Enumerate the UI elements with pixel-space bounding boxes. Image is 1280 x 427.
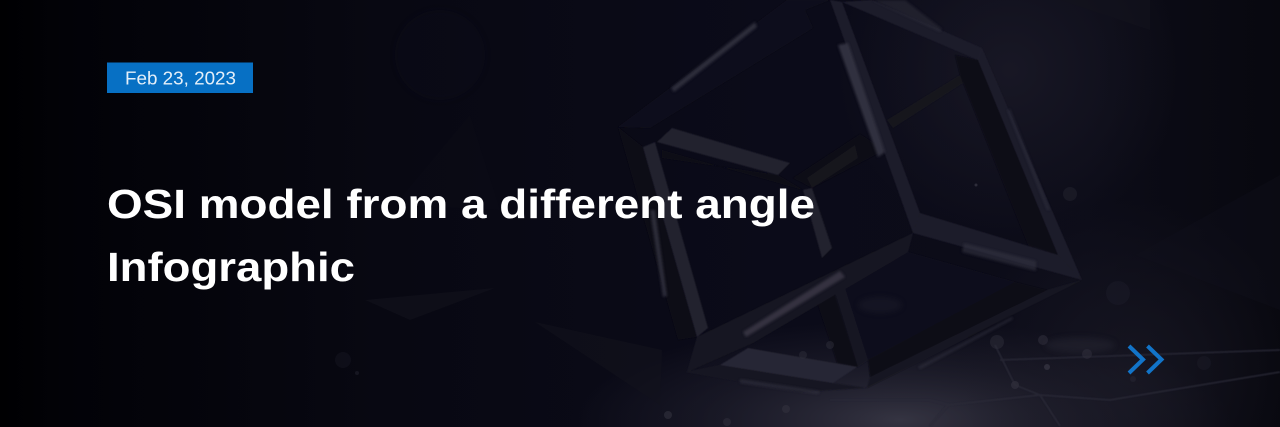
icon: double chevron arrow <box>1129 346 1162 373</box>
network mesh <box>830 345 1280 426</box>
cube wireframe <box>618 0 1082 392</box>
network nodes <box>335 184 1211 426</box>
cube: left face bars <box>643 128 832 337</box>
cube: interior of lower face <box>845 252 1015 360</box>
cube: bottom bars <box>685 233 1082 392</box>
cube: lower-left plate <box>720 348 857 383</box>
title <box>107 181 815 290</box>
background shards <box>365 0 1280 405</box>
date badge: Feb 23, 2023 <box>125 68 236 88</box>
cube: glowing highlights <box>650 0 1050 394</box>
cube: dark lower-right panel <box>868 282 1047 377</box>
title: OSI model from a different angle <box>107 181 815 227</box>
cube: under-shadow of left bar <box>662 150 803 190</box>
cube: dark back frame <box>618 55 1058 367</box>
cube: top-left bar <box>618 0 830 128</box>
title: Infographic <box>107 244 355 290</box>
date badge <box>107 62 253 93</box>
cube: inner back bars <box>807 75 963 188</box>
cube: right face bars <box>830 0 1082 280</box>
